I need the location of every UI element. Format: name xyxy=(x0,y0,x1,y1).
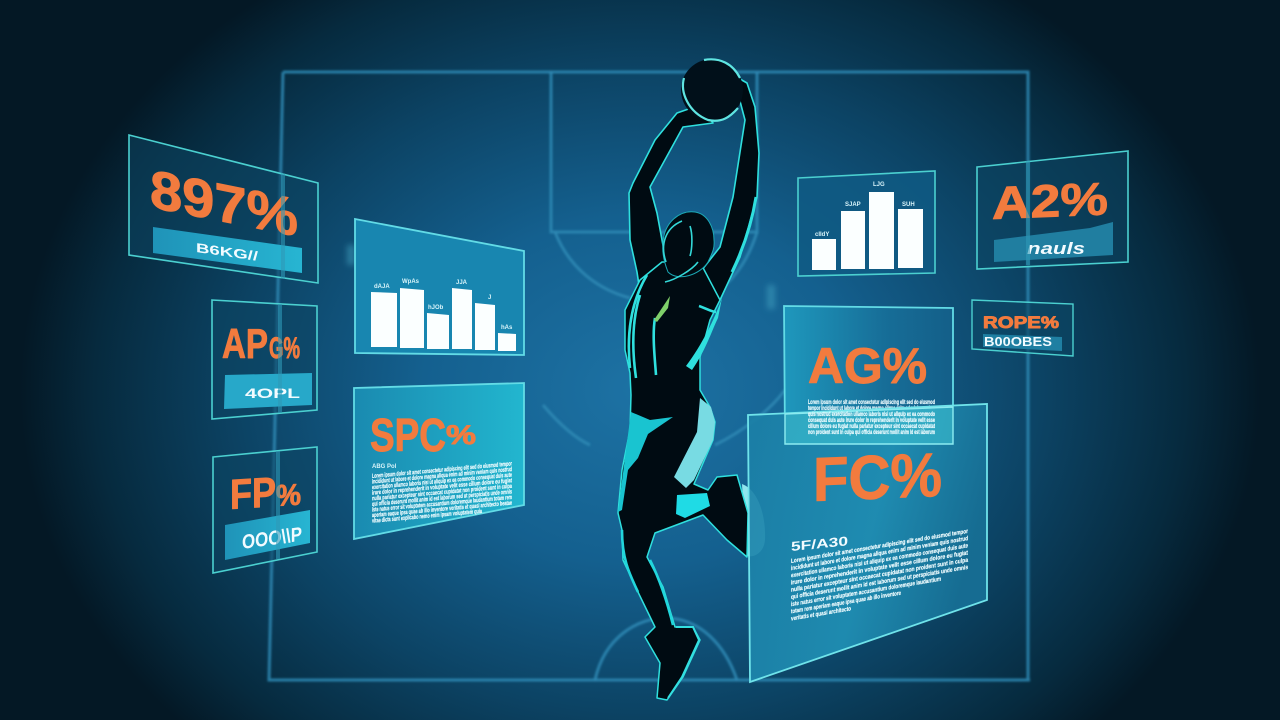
player silhouette xyxy=(618,59,765,700)
chart bar labels: SJAP xyxy=(845,202,861,208)
stat bar xyxy=(153,227,302,273)
body text: irure dolor in reprehenderit in voluptate velit esse cillum dolore eu fugiat xyxy=(372,477,512,497)
chart bar labels: LJG xyxy=(873,182,885,188)
head xyxy=(663,212,714,277)
overlapping AG text lines xyxy=(808,411,935,436)
body text: Lorem ipsum dolor sit amet consectetur adipiscing elit sed do eiusmod tempor xyxy=(791,528,968,565)
body text: aperiam eaque ipsa quae ab illo inventore veritatis et quasi architecto beatae xyxy=(372,500,512,519)
court line seen through panel xyxy=(276,451,280,559)
left arm xyxy=(629,105,713,292)
court line seen through panel xyxy=(1026,161,1030,265)
right arm xyxy=(698,75,759,300)
body text: iste natus error sit voluptatem accusantium doloremque laudantium xyxy=(791,576,941,608)
body text: Lorem ipsum dolor sit amet consectetur adipiscing elit sed do eiusmod tempor xyxy=(372,460,512,480)
stat bar xyxy=(224,373,312,409)
stat label: 4OPL xyxy=(245,385,301,401)
court line seen through panel xyxy=(278,304,282,413)
stat value: AP xyxy=(222,320,268,367)
stat label: B6KG// xyxy=(196,240,259,264)
chart bar labels: dAJA xyxy=(374,284,390,290)
overlapping AG text lines: consequat duis aute irure dolor in reprehenderit in voluptate velit esse xyxy=(808,417,935,424)
knee highlight xyxy=(676,493,710,518)
basketball xyxy=(681,59,743,121)
body text: nulla pariatur excepteur sint occaecat cupidatat non proident sunt in culpa xyxy=(372,483,512,502)
panel: FP stat xyxy=(213,447,317,573)
stat bar xyxy=(983,334,1062,351)
overlapping AG text lines: non proident sunt in culpa qui officia deserunt mollit anim id est laborum xyxy=(808,429,935,436)
panel: right bar chart xyxy=(798,171,935,276)
body and legs xyxy=(618,262,748,700)
stat value: SPC xyxy=(370,409,446,461)
body text: veritatis et quasi architecto xyxy=(791,605,851,623)
body text: tempor incididunt ut labore et dolore magna aliqua enim ad minim veniam xyxy=(808,405,935,412)
chart bar labels: hAs xyxy=(501,325,513,331)
chart bar labels: WpAs xyxy=(402,279,420,285)
body text: totam rem aperiam eaque ipsa quae ab illo inventore xyxy=(791,590,901,615)
body text: quis nostrud exercitation ullamco laboris nisi ut aliquip ex ea commodo xyxy=(808,411,935,418)
body text: qui officia deserunt mollit anim id est laborum sed ut perspiciatis unde omnis xyxy=(372,488,512,508)
chart bar labels: hJOb xyxy=(428,305,444,311)
body text: Lorem ipsum dolor sit amet consectetur adipiscing elit sed do eiusmod xyxy=(808,399,935,406)
stat value: AG% xyxy=(808,338,927,394)
stat value: 897% xyxy=(150,158,298,248)
stat value suffix: % xyxy=(276,479,301,513)
body text: exercitation ullamco laboris nisi ut aliquip ex ea commodo consequat duis aute xyxy=(791,542,968,579)
body text: exercitation ullamco laboris nisi ut aliquip ex ea commodo consequat duis aute xyxy=(372,472,512,491)
stat bar xyxy=(994,222,1113,262)
panel: left bar chart xyxy=(355,219,524,355)
chart bar labels: J xyxy=(488,295,491,301)
shorts left highlight xyxy=(618,412,673,512)
small heading: 5F/A30 xyxy=(791,533,848,554)
panel: A2% stat xyxy=(977,151,1128,269)
right flank highlight xyxy=(686,298,722,370)
re-lit lower part of AG panel xyxy=(785,407,953,444)
stat value: ROPE% xyxy=(983,313,1059,332)
body text: non proident sunt in culpa qui officia deserunt mollit anim id est laborum xyxy=(808,429,935,436)
body text: consequat duis aute irure dolor in reprehenderit in voluptate velit esse xyxy=(808,417,935,424)
stat value: A2% xyxy=(992,172,1108,229)
panel: 897% stat xyxy=(129,135,318,283)
panel: FC% stat with text xyxy=(748,404,987,682)
body text xyxy=(808,399,935,436)
right arm highlight xyxy=(732,197,756,272)
shorts right highlight xyxy=(674,398,715,488)
stat value: FP xyxy=(230,468,276,518)
faint background glows xyxy=(347,245,775,309)
panel: small stat xyxy=(972,300,1073,356)
chart bar labels: JJA xyxy=(456,280,468,286)
body text: irure dolor in reprehenderit in voluptate velit esse cillum dolore eu fugiat xyxy=(791,550,968,587)
leg highlight xyxy=(622,530,673,625)
chart bars xyxy=(371,288,516,351)
body text: qui officia deserunt mollit anim id est laborum sed ut perspiciatis unde omnis xyxy=(791,564,968,601)
jersey highlights xyxy=(629,275,716,378)
shoe highlight xyxy=(668,627,699,698)
stat value: FC% xyxy=(813,441,942,515)
chart bars xyxy=(812,192,923,270)
stat bar xyxy=(225,510,310,560)
court line seen through panel xyxy=(281,173,285,279)
body text: vitae dicta sunt explicabo nemo enim ipsam voluptatem quia xyxy=(372,508,482,525)
body text: incididunt ut labore et dolore magna aliqua enim ad minim veniam quis nostrud xyxy=(372,466,512,486)
chart bar labels xyxy=(374,279,513,331)
stat value suffix: % xyxy=(446,420,476,450)
stat label: nauls xyxy=(1027,239,1085,258)
body text: nulla pariatur excepteur sint occaecat cupidatat non proident sunt in culpa xyxy=(791,557,968,594)
body text: cillum dolore eu fugiat nulla pariatur excepteur sint occaecat cupidatat xyxy=(808,423,935,430)
panel: APG stat xyxy=(212,300,317,419)
body text xyxy=(372,460,512,525)
chart bar labels xyxy=(815,182,915,238)
overlapping AG text lines: cillum dolore eu fugiat nulla pariatur excepteur sint occaecat cupidatat xyxy=(808,423,935,430)
chart bar labels: SUH xyxy=(902,202,915,208)
jersey logo xyxy=(654,296,670,322)
ball rim light xyxy=(683,59,740,121)
small heading: ABG Pol xyxy=(372,464,397,470)
head highlights xyxy=(664,221,698,282)
chart bar labels: cIIdY xyxy=(815,232,829,238)
panel: SPC stat with text xyxy=(354,383,524,539)
body text xyxy=(791,528,968,623)
panel: AG% stat with text xyxy=(784,306,953,444)
overlapping AG text lines: quis nostrud exercitation ullamco laboris nisi ut aliquip ex ea commodo xyxy=(808,411,935,418)
body text: incididunt ut labore et dolore magna aliqua enim ad minim veniam quis nostrud xyxy=(791,535,968,572)
body text: iste natus error sit voluptatem accusantium doloremque laudantium totam rem xyxy=(372,494,512,514)
stat label: OOO\\P xyxy=(242,524,302,554)
stat value suffix: G% xyxy=(269,332,300,365)
stat label: B00OBES xyxy=(984,334,1052,349)
basketball court lines xyxy=(269,72,1030,680)
rear shoe accent xyxy=(742,484,765,556)
